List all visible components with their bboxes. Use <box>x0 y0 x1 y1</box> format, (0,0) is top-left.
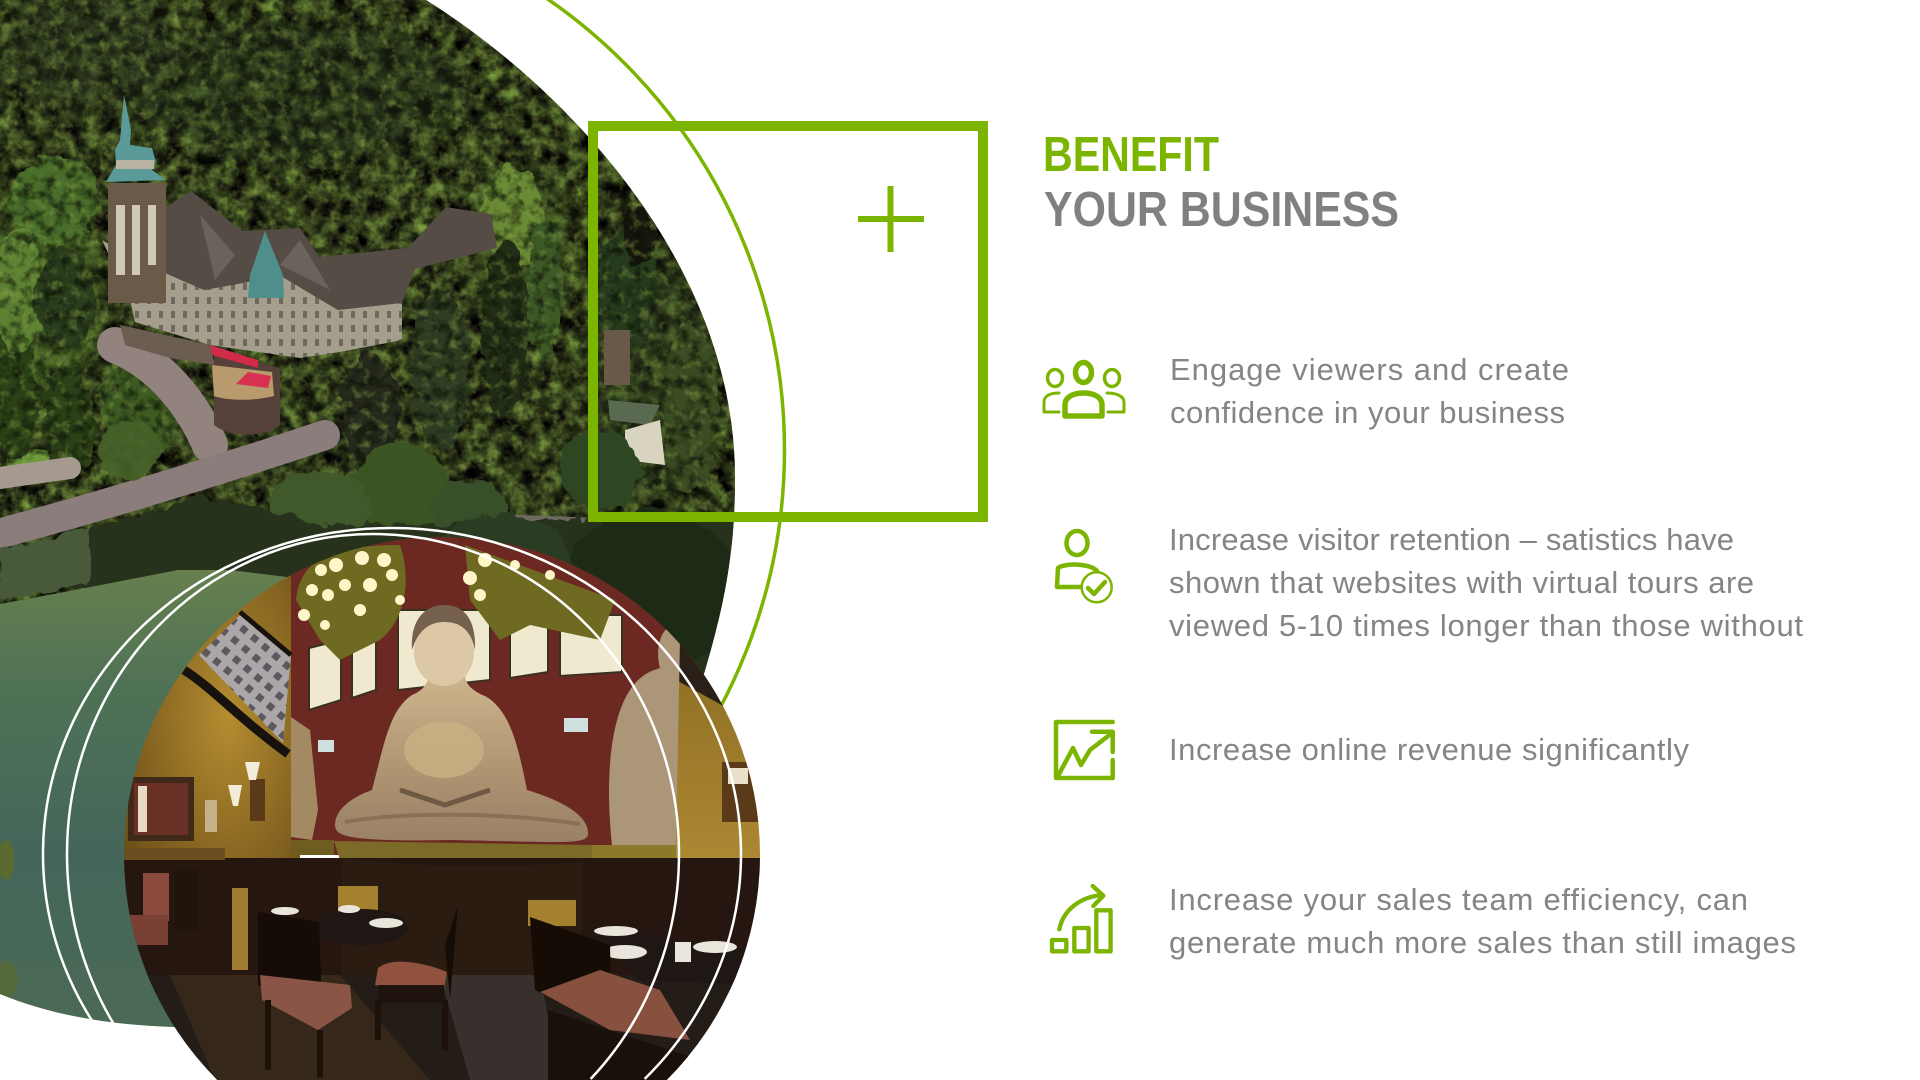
green arc <box>0 0 784 998</box>
left gold wall <box>124 570 300 870</box>
text: engage viewers <box>1170 352 1569 430</box>
windows <box>309 610 622 710</box>
text: visitor retention: shown that websites with virtual tours are <box>1169 565 1754 600</box>
mid-hill tree tone <box>0 0 720 500</box>
photo: restaurant interior with Buddha statue <box>120 530 770 1080</box>
shore trees <box>0 840 14 880</box>
icon: line chart in frame <box>1056 722 1113 778</box>
terrace with red awnings <box>210 345 280 435</box>
Buddha statue <box>335 605 588 842</box>
mirror <box>128 777 194 841</box>
lawn <box>6 449 50 466</box>
icon: person with check mark <box>1057 531 1112 602</box>
text: online revenue: Increase online revenue significantly <box>1169 732 1690 767</box>
right reflected statue <box>609 625 680 845</box>
tree highlights <box>0 0 760 620</box>
white ring outer <box>43 528 741 1079</box>
text: sales team efficiency <box>1169 882 1796 960</box>
lake <box>0 570 300 1040</box>
text: visitor retention <box>1169 522 1803 643</box>
heading: BENEFIT <box>1043 128 1219 182</box>
tree grain <box>0 0 760 620</box>
chair foreground right <box>530 917 700 1080</box>
drive and main road <box>0 345 720 536</box>
gold ledge <box>334 841 592 858</box>
terrace building lower floor <box>120 325 215 365</box>
cottage and greenhouse behind square <box>604 330 665 465</box>
heading <box>1043 128 1399 237</box>
right gold wall <box>676 640 766 875</box>
text: visitor retention: viewed 5-10 times longer than those without <box>1169 608 1803 643</box>
floor <box>120 975 770 1080</box>
wall sconces <box>205 762 760 832</box>
hotel facade <box>102 240 402 358</box>
forest background <box>0 0 760 620</box>
red wall <box>291 535 676 855</box>
plus sign <box>858 186 924 252</box>
chair with pink seat, foreground centre <box>375 905 458 1050</box>
text: engage viewers: Engage viewers and create <box>1170 352 1569 387</box>
foreground trees <box>0 420 740 690</box>
chandeliers <box>296 545 615 660</box>
text: sales team efficiency: Increase your sales team efficiency, can <box>1169 882 1748 917</box>
central pedestal <box>342 858 582 982</box>
text: sales team efficiency: generate much more sales than still images <box>1169 925 1796 960</box>
trees around hotel <box>0 155 718 495</box>
exit signs <box>318 740 334 752</box>
main tower <box>106 95 166 303</box>
left reflected statue <box>291 717 318 840</box>
hotel roofs <box>140 191 497 310</box>
text: engage viewers: confidence in your business <box>1170 395 1565 430</box>
white ring inner <box>67 534 679 1079</box>
dark wainscot <box>120 858 770 988</box>
round table <box>338 909 408 945</box>
second spire <box>248 231 284 298</box>
icon: bars with rising arrow <box>1052 886 1111 951</box>
chair back, right <box>528 900 576 926</box>
photo: aerial view of hotel, forest and lake <box>0 0 760 1040</box>
patterned panel and banister <box>199 615 291 743</box>
icon: group of people <box>1044 362 1124 416</box>
right table <box>732 951 745 984</box>
green square frame <box>593 126 983 517</box>
heading: YOUR BUSINESS <box>1044 183 1399 237</box>
chair with pink seat, foreground left <box>258 912 352 1078</box>
left chairs <box>128 870 378 970</box>
text: visitor retention: Increase visitor retention – satistics have <box>1169 522 1734 557</box>
